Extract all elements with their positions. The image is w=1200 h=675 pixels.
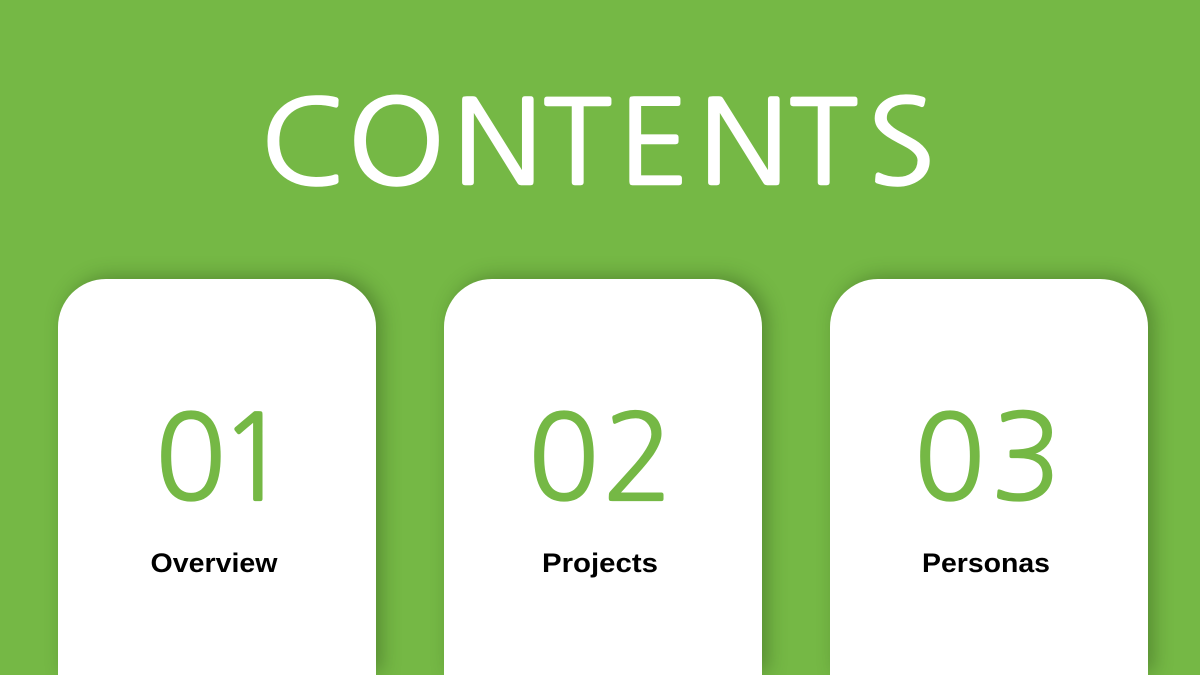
title: CONTENTS — [260, 86, 936, 201]
panel: card 2 background — [444, 279, 762, 675]
panel: card 3 background — [830, 279, 1148, 675]
number 03: 03 — [914, 399, 1062, 518]
number 02: 02 — [528, 399, 674, 518]
label: Overview: Overview — [150, 548, 279, 578]
number 01: 01 — [154, 399, 290, 518]
panel: card 1 background — [58, 279, 376, 675]
label: Personas: Personas — [922, 548, 1050, 578]
label: Projects: Projects — [542, 548, 658, 578]
